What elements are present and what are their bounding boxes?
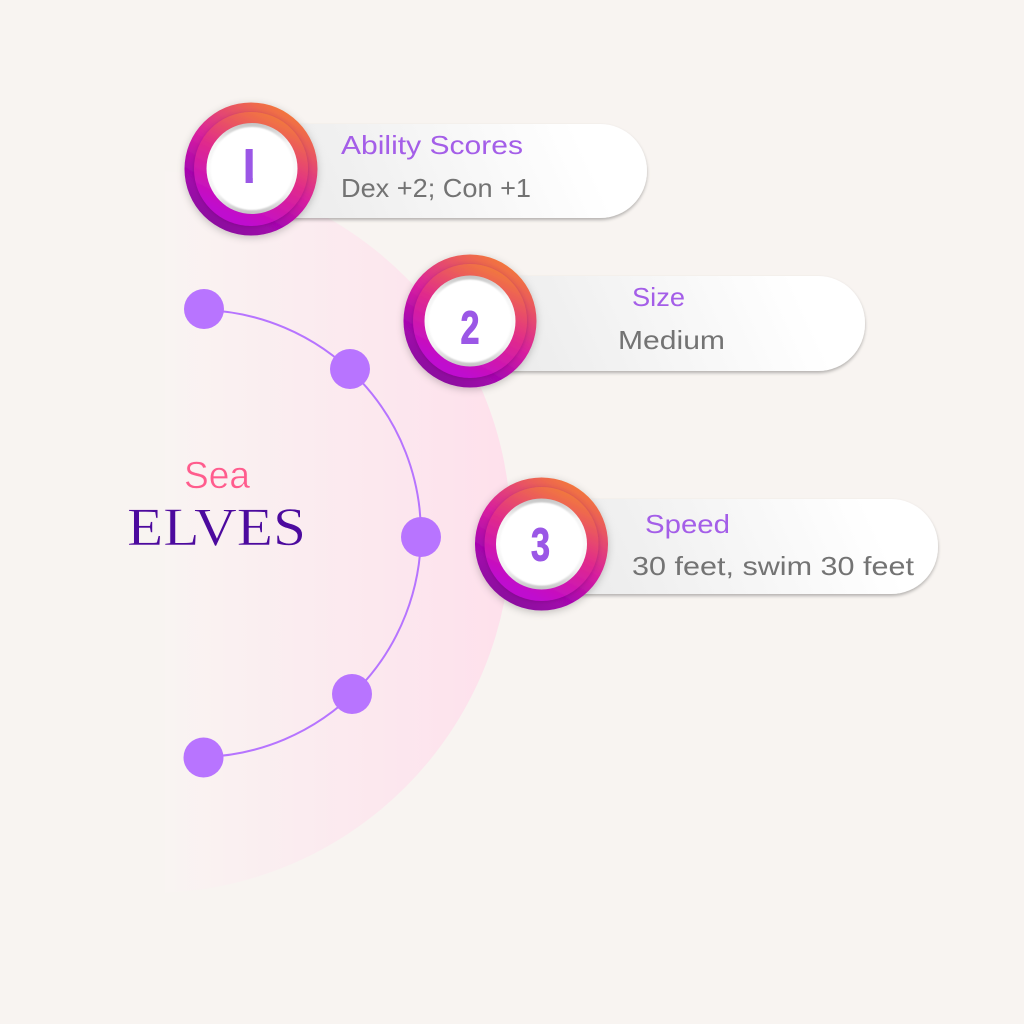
value: 30 feet, swim 30 feet: 30 feet, swim 30 feet [632,551,915,581]
title line: ELVES: ELVES [127,497,306,557]
dot 2 [330,349,370,389]
number 3: 3 [531,518,550,570]
dot 4 [332,674,372,714]
pill 2 [460,276,865,371]
pink semicircle panel [304,220,508,856]
value: Dex +2; Con +1: Dex +2; Con +1 [341,173,531,203]
badge 3 [475,478,608,610]
dot 3 [401,517,441,557]
pill 1 [240,124,647,218]
card 1: Ability Scores [184,102,647,236]
dot 1 [184,289,224,329]
badge 2 [404,254,536,388]
title line: Sea: Sea [184,455,251,497]
title: Sea Elves [127,455,306,557]
heading: Size: Size [632,282,685,312]
dot 5 [184,738,224,778]
heading: Speed: Speed [645,509,730,539]
badge 1 [184,102,318,236]
timeline arc with dots [184,289,441,778]
card 3: Speed [475,478,938,610]
number 2: 2 [460,302,480,354]
heading: Ability Scores: Ability Scores [341,130,523,160]
number 1: 1 [234,141,261,194]
value: Medium: Medium [618,325,725,355]
arc line [204,310,421,757]
card 2: Size [404,254,865,388]
pill 3 [530,499,938,594]
